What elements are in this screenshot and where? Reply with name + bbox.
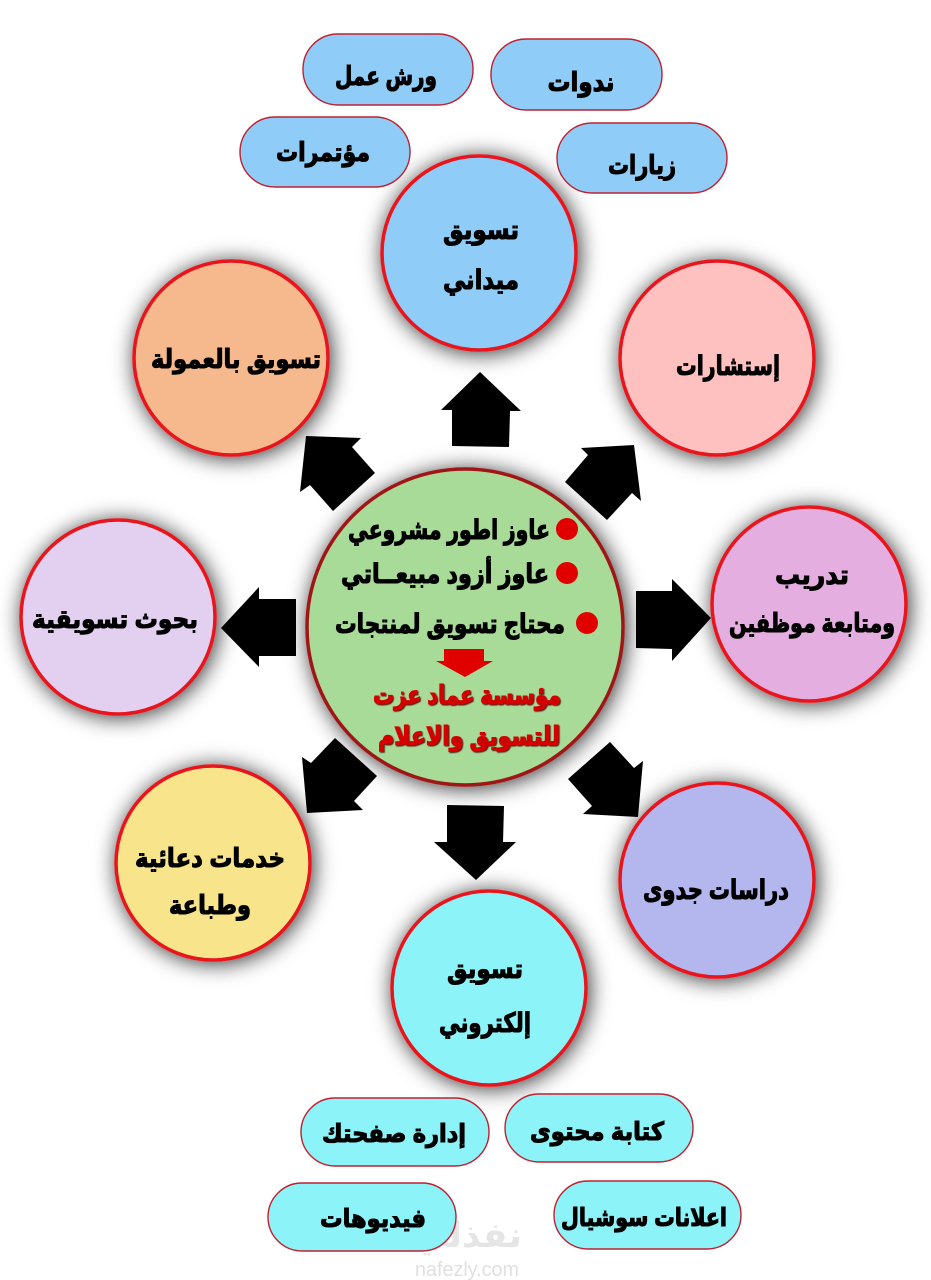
- pill: workshops: [303, 34, 473, 105]
- line 2: عاوز أزود مبيعــاتي: [341, 556, 549, 590]
- circle: commission marketing: [134, 261, 328, 455]
- company name: للتسويق والاعلام: [378, 721, 560, 752]
- circle: marketing research: [21, 520, 215, 714]
- circle: e-marketing: إلكتروني: [439, 1008, 531, 1039]
- pill: workshops: ورش عمل: [335, 61, 437, 92]
- circle: field marketing: [382, 156, 576, 350]
- pill: visits: [557, 123, 727, 193]
- pill: page management: إدارة صفحتك: [322, 1120, 466, 1148]
- circle: consultations: إستشارات: [676, 351, 780, 382]
- circle: field marketing: ميداني: [443, 265, 519, 296]
- arrow: left: [221, 587, 296, 667]
- circle: advertising and printing: وطباعة: [169, 890, 251, 921]
- company name: [373, 680, 561, 752]
- circle: advertising and printing: خدمات دعائية: [135, 843, 285, 873]
- circle: e-marketing: تسويق: [447, 954, 523, 985]
- red arrow: [436, 649, 493, 677]
- circle: training: تدريب: [775, 560, 849, 591]
- bullet 1: [556, 518, 578, 540]
- arrow: right: [636, 579, 711, 661]
- circle: field marketing: تسويق: [443, 215, 519, 246]
- arrows: [221, 372, 711, 880]
- pill: videos: فيديوهات: [320, 1205, 426, 1234]
- arrow: upper left: [300, 436, 375, 511]
- circle: feasibility studies: [620, 783, 814, 977]
- arrow: lower right: [568, 742, 643, 817]
- line 1: عاوز اطور مشروعي: [348, 515, 550, 546]
- bullet 3: [576, 612, 598, 634]
- circle: e-marketing: [392, 891, 586, 1085]
- arrow: lower left: [302, 738, 377, 813]
- pill: seminars: ندوات: [548, 67, 614, 98]
- circle: feasibility studies: دراسات جدوى: [643, 875, 789, 906]
- bullet 2: [556, 562, 578, 584]
- pill: visits: زيارات: [608, 150, 676, 180]
- pill: content writing: كتابة محتوى: [530, 1118, 664, 1147]
- circle: marketing research: بحوث تسويقية: [32, 604, 198, 635]
- pill: seminars: [491, 39, 662, 110]
- arrow: up: [441, 372, 521, 447]
- pill: social ads: اعلانات سوشيال: [561, 1204, 727, 1233]
- center circle: [307, 469, 623, 785]
- pill: videos: [268, 1183, 456, 1251]
- watermark: [412, 1217, 522, 1280]
- circle: consultations: [620, 261, 814, 455]
- circle: advertising and printing: [116, 766, 310, 960]
- pill: page management: [301, 1098, 489, 1166]
- circle: training: [712, 507, 906, 701]
- watermark: نفذلي: [412, 1217, 522, 1256]
- pill: content writing: [505, 1094, 693, 1162]
- line 3: محتاج تسويق لمنتجات: [335, 609, 565, 640]
- arrow: upper right: [565, 445, 641, 520]
- company name: مؤسسة عماد عزت: [373, 680, 561, 711]
- circle: commission marketing: تسويق بالعمولة: [151, 344, 321, 375]
- pill: conferences: مؤتمرات: [276, 137, 370, 168]
- pill: social ads: [554, 1181, 741, 1249]
- arrow: down: [434, 805, 516, 880]
- pill: conferences: [240, 117, 410, 187]
